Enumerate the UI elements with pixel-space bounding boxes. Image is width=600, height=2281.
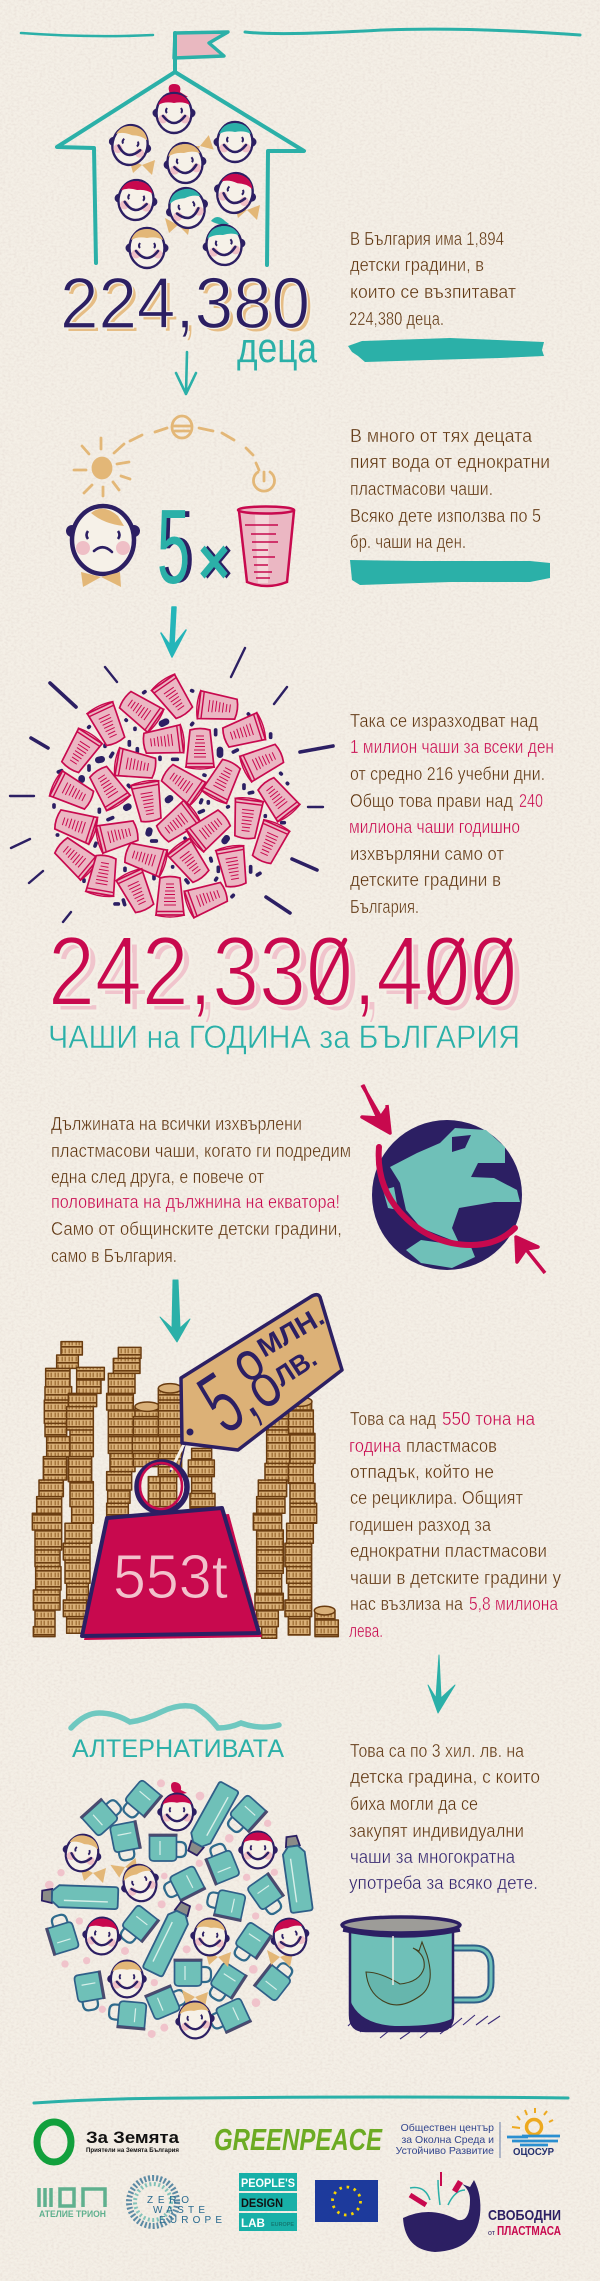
text block: reusable cups: употреба за всяко дете.: [349, 1872, 538, 1893]
footer divider: [34, 2097, 568, 2103]
heading: alternative: [71, 1706, 284, 1763]
logo: Zero Waste Europe: ZERO: [147, 2195, 189, 2206]
logo: People's Design Lab: LAB: [241, 2216, 265, 2230]
icon: price tag 5,8 mln: МЛН.: [252, 1301, 329, 1363]
text block: tons and cost: Това са над: [350, 1408, 436, 1429]
text block: daily use: пият вода от еднократни: [350, 451, 550, 472]
text block: equator comparison: една след друга, е повече от: [51, 1166, 264, 1187]
icon: disposable cup: [238, 506, 294, 586]
headline number: cups per year: 242,330,400: [48, 916, 517, 1026]
text block: cups per year: 240: [519, 790, 543, 811]
text block: reusable cups: детска градина, с които: [350, 1766, 540, 1787]
text block: equator comparison: само в България.: [51, 1245, 177, 1266]
logo: OTsOSUR: Устойчиво Развитие: [396, 2145, 494, 2157]
text block: cups per year: детските градини в: [350, 869, 501, 890]
icon: enamel mug with whale: [342, 1917, 500, 2039]
text block: cups per year: Общо това прави над: [350, 790, 513, 811]
text block: daily use: Всяко дете използва по 5: [350, 505, 541, 526]
ball of reusable mugs, bottles and children: [42, 1779, 314, 2040]
logo: whale Free from plastic: [403, 2172, 561, 2252]
logo: whale Free from plastic: СВОБОДНИ: [488, 2207, 561, 2224]
logo: People's Design Lab: DESIGN: [241, 2196, 283, 2210]
brush stroke 1: [348, 338, 544, 362]
text block: tons and cost: 550 тона на: [442, 1408, 536, 1429]
text block: cups per year: от средно 216 учебни дни.: [350, 763, 545, 784]
text block: reusable cups: Това са по 3 хил. лв. на: [350, 1740, 525, 1761]
text block: equator comparison: Само от общинските детски градини,: [51, 1218, 342, 1239]
text block: daily use: пластмасови чаши.: [350, 478, 493, 499]
icon: weight 553t: [82, 1462, 262, 1640]
text block: equator comparison: пластмасови чаши, когато ги подредим: [51, 1140, 351, 1161]
multiplier: 5 x: ×: [198, 524, 230, 598]
logo: People's Design Lab: [239, 2173, 297, 2231]
logo: OTsOSUR: ОЦОСУР: [513, 2146, 554, 2158]
text block: tons and cost: годишен разход за: [349, 1514, 492, 1535]
arrow: globe top: [362, 1085, 390, 1133]
arrow 4: [428, 1655, 455, 1713]
text block: kindergartens: В България има 1,894: [350, 228, 504, 249]
text block: equator comparison: [51, 1113, 351, 1266]
ball of discarded cups: [47, 672, 302, 919]
text block: daily use: [350, 425, 550, 552]
text block: equator comparison: половината на дължнина на екватора!: [51, 1191, 340, 1212]
logo: Greenpeace: GREENPEACE: [214, 2122, 383, 2157]
heading: alternative: АЛТЕРНАТИВАТА: [72, 1735, 284, 1763]
text block: tons and cost: се рециклира. Общият: [350, 1487, 523, 1508]
text block: tons and cost: отпадък, който не: [350, 1461, 494, 1482]
logo: Zero Waste Europe: WASTE: [153, 2205, 205, 2216]
text block: reusable cups: закупят индивидуални: [349, 1820, 524, 1841]
headline number: cups per year: 242,330,400: [55, 922, 524, 1032]
rays around the cup ball: [10, 648, 333, 922]
headline number: cups per year: ЧАШИ на ГОДИНА за БЪЛГАРИЯ: [48, 1019, 520, 1055]
text block: kindergartens: 224,380 деца.: [349, 308, 444, 329]
logo: OTsOSUR: [396, 2108, 560, 2158]
big number: children: 224,380: [64, 268, 314, 348]
big number: children: деца: [237, 324, 318, 371]
icon: kindergarten house with flag: [57, 32, 304, 265]
logo: OTsOSUR: за Околна Среда и: [401, 2134, 494, 2146]
text block: reusable cups: чаши за многократна: [350, 1846, 516, 1867]
logo: Za Zemyata: За Земята: [86, 2128, 180, 2147]
logo: Atelie Trion: АТЕЛИЕ ТРИОН: [39, 2209, 106, 2219]
text block: kindergartens: които се възпитават: [350, 281, 517, 302]
logo: Za Zemyata: [37, 2122, 180, 2162]
logo: Atelie Trion: [39, 2188, 106, 2219]
logo: People's Design Lab: EUROPE: [271, 2222, 294, 2228]
logo: Za Zemyata: Приятели на Земята България: [86, 2148, 180, 2154]
top divider lines: [21, 29, 580, 36]
icon: price tag 5,8 mln: ЛВ.: [269, 1343, 322, 1392]
icon: weight 553t: 553t: [113, 1543, 228, 1612]
logo: OTsOSUR: Обществен център: [401, 2122, 494, 2134]
text block: daily use: бр. чаши на ден.: [350, 531, 466, 552]
text block: tons and cost: лева.: [349, 1620, 383, 1641]
text block: daily use: В много от тях децата: [350, 425, 533, 446]
icon: price tag 5,8 mln: 5,8: [181, 1329, 297, 1452]
text block: cups per year: [349, 710, 554, 917]
logo: whale Free from plastic: от: [488, 2230, 496, 2237]
text block: reusable cups: биха могли да се: [350, 1793, 478, 1814]
arrow 1: [176, 352, 196, 394]
text block: equator comparison: Дължината на всички изхвърлени: [51, 1113, 302, 1134]
logo: whale Free from plastic: ПЛАСТМАСА: [497, 2223, 561, 2238]
text block: tons and cost: чаши в детските градини у: [350, 1567, 562, 1588]
icon: sad child face: [66, 506, 140, 587]
logo: Zero Waste Europe: [129, 2178, 222, 2226]
arrow 3: [160, 1280, 190, 1342]
text block: tons and cost: 5,8 милиона: [469, 1593, 559, 1614]
text block: reusable cups: [349, 1740, 540, 1893]
text block: tons and cost: пластмасов: [406, 1435, 497, 1456]
logo: Zero Waste Europe: EUROPE: [159, 2215, 222, 2226]
brush stroke 2: [350, 560, 550, 585]
arrow 2: [161, 607, 186, 657]
coin stacks: [32, 1342, 338, 1638]
text block: tons and cost: еднократни пластмасови: [350, 1540, 547, 1561]
arrow: globe bottom: [516, 1237, 545, 1273]
text block: tons and cost: нас възлиза на: [350, 1593, 464, 1614]
icon: globe with equator band: [372, 1120, 522, 1270]
text block: kindergartens: детски градини, в: [350, 254, 484, 275]
icon: sun to sunset dashed arc: [74, 416, 274, 496]
logo: EU flag: [315, 2180, 378, 2222]
text block: cups per year: изхвърляни само от: [350, 843, 504, 864]
text block: cups per year: Така се изразходват над: [350, 710, 538, 731]
text block: kindergartens: [349, 228, 517, 329]
multiplier: 5 x: 5: [161, 488, 195, 606]
text block: tons and cost: [349, 1408, 562, 1641]
multiplier: 5 x: 5: [157, 488, 190, 606]
big number: children: 224,380: [60, 264, 310, 344]
text block: tons and cost: година: [349, 1435, 402, 1456]
children faces in the house: [105, 84, 261, 268]
text block: cups per year: България.: [350, 896, 419, 917]
multiplier: 5 x: ×: [201, 524, 233, 598]
logo: People's Design Lab: PEOPLE'S: [241, 2176, 295, 2190]
text block: cups per year: 1 милион чаши за всеки ден: [350, 736, 554, 757]
text block: cups per year: милиона чаши годишно: [349, 816, 520, 837]
